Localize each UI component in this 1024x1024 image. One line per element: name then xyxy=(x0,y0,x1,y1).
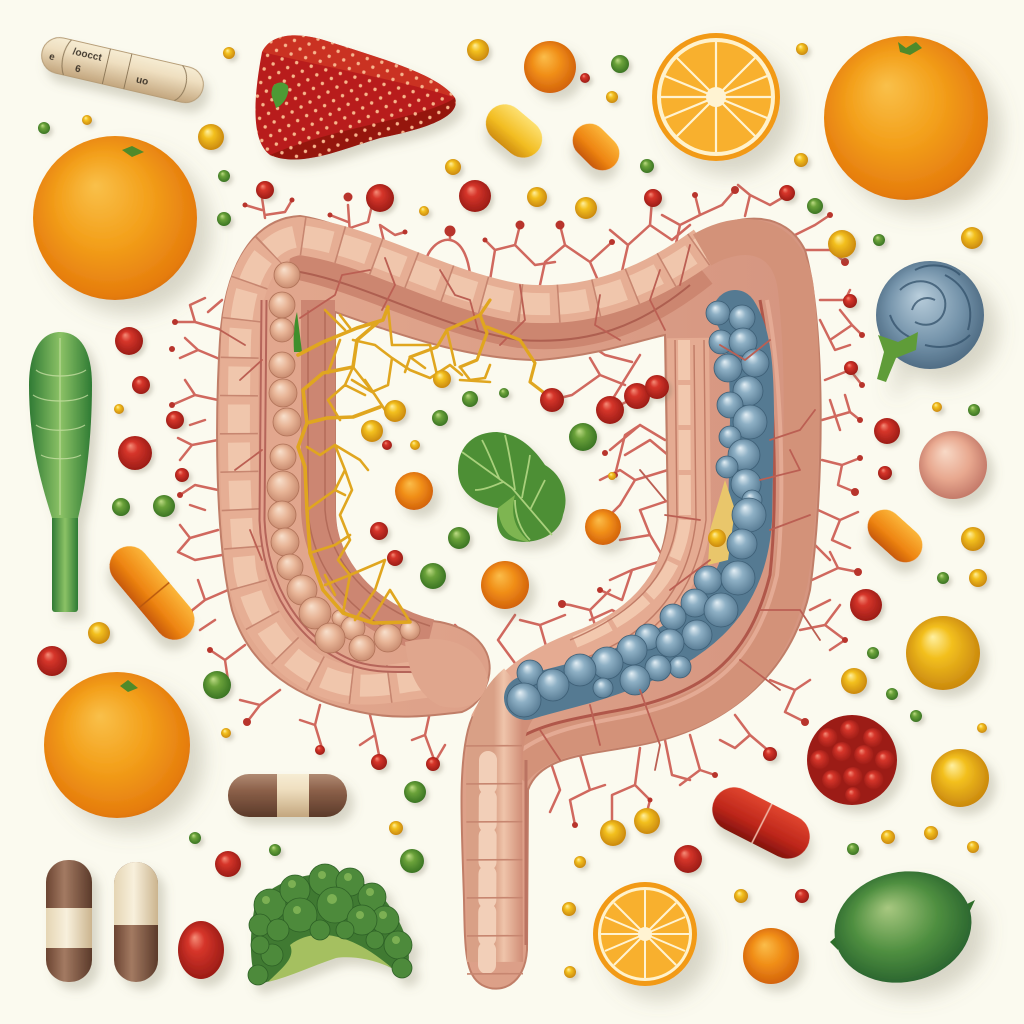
yellow capsule top xyxy=(478,97,550,165)
blue sphere with stem xyxy=(876,261,984,382)
orange: top right xyxy=(824,36,988,200)
capsule: beige with print: /oocct xyxy=(72,47,103,64)
surface veins xyxy=(220,245,820,770)
yellow vessel network xyxy=(298,300,543,623)
capsule: beige with print: 6 xyxy=(74,64,82,76)
broccoli xyxy=(248,864,412,985)
orange capsule top xyxy=(566,117,626,177)
outer haustra row xyxy=(239,236,705,686)
orange slice top xyxy=(652,33,780,161)
left bulge xyxy=(405,639,488,708)
strawberry xyxy=(255,35,456,160)
scattered green dots xyxy=(38,55,980,873)
capsule: beige with print: e xyxy=(48,51,56,63)
left red lining xyxy=(262,300,470,680)
red oval pill xyxy=(178,921,224,979)
right inner muscle band xyxy=(490,338,690,725)
red capillary network around colon xyxy=(172,185,862,825)
left muscular band xyxy=(318,300,430,636)
lime xyxy=(824,859,982,995)
orange capsule left xyxy=(101,538,203,648)
colon xyxy=(217,216,821,989)
red capsule right xyxy=(705,780,817,866)
orange capsule right xyxy=(861,503,929,569)
blue spheres xyxy=(507,301,769,717)
yellow content xyxy=(708,480,735,565)
top muscular band xyxy=(290,258,700,329)
colon silhouette xyxy=(217,216,821,989)
descending colon segments xyxy=(494,690,522,962)
large balls xyxy=(395,41,989,984)
orange slice bottom xyxy=(593,882,697,986)
cream capsule vertical xyxy=(114,862,158,982)
orange: lower left xyxy=(44,672,190,818)
capsule: beige with print xyxy=(38,34,207,106)
brown and cream capsule horizontal xyxy=(228,774,347,817)
raspberry xyxy=(807,715,897,805)
brown capsule vertical xyxy=(46,860,92,982)
orange: left xyxy=(33,136,197,300)
blue stool lumen xyxy=(526,312,752,698)
bead row xyxy=(267,262,420,661)
capillary end dots xyxy=(169,186,865,828)
green patch xyxy=(294,312,302,352)
capsule: beige with print: uo xyxy=(135,75,149,88)
green leaf spoon xyxy=(29,332,92,612)
central leaf xyxy=(458,432,566,542)
scattered red dots xyxy=(37,73,900,903)
right outer band xyxy=(512,237,802,772)
